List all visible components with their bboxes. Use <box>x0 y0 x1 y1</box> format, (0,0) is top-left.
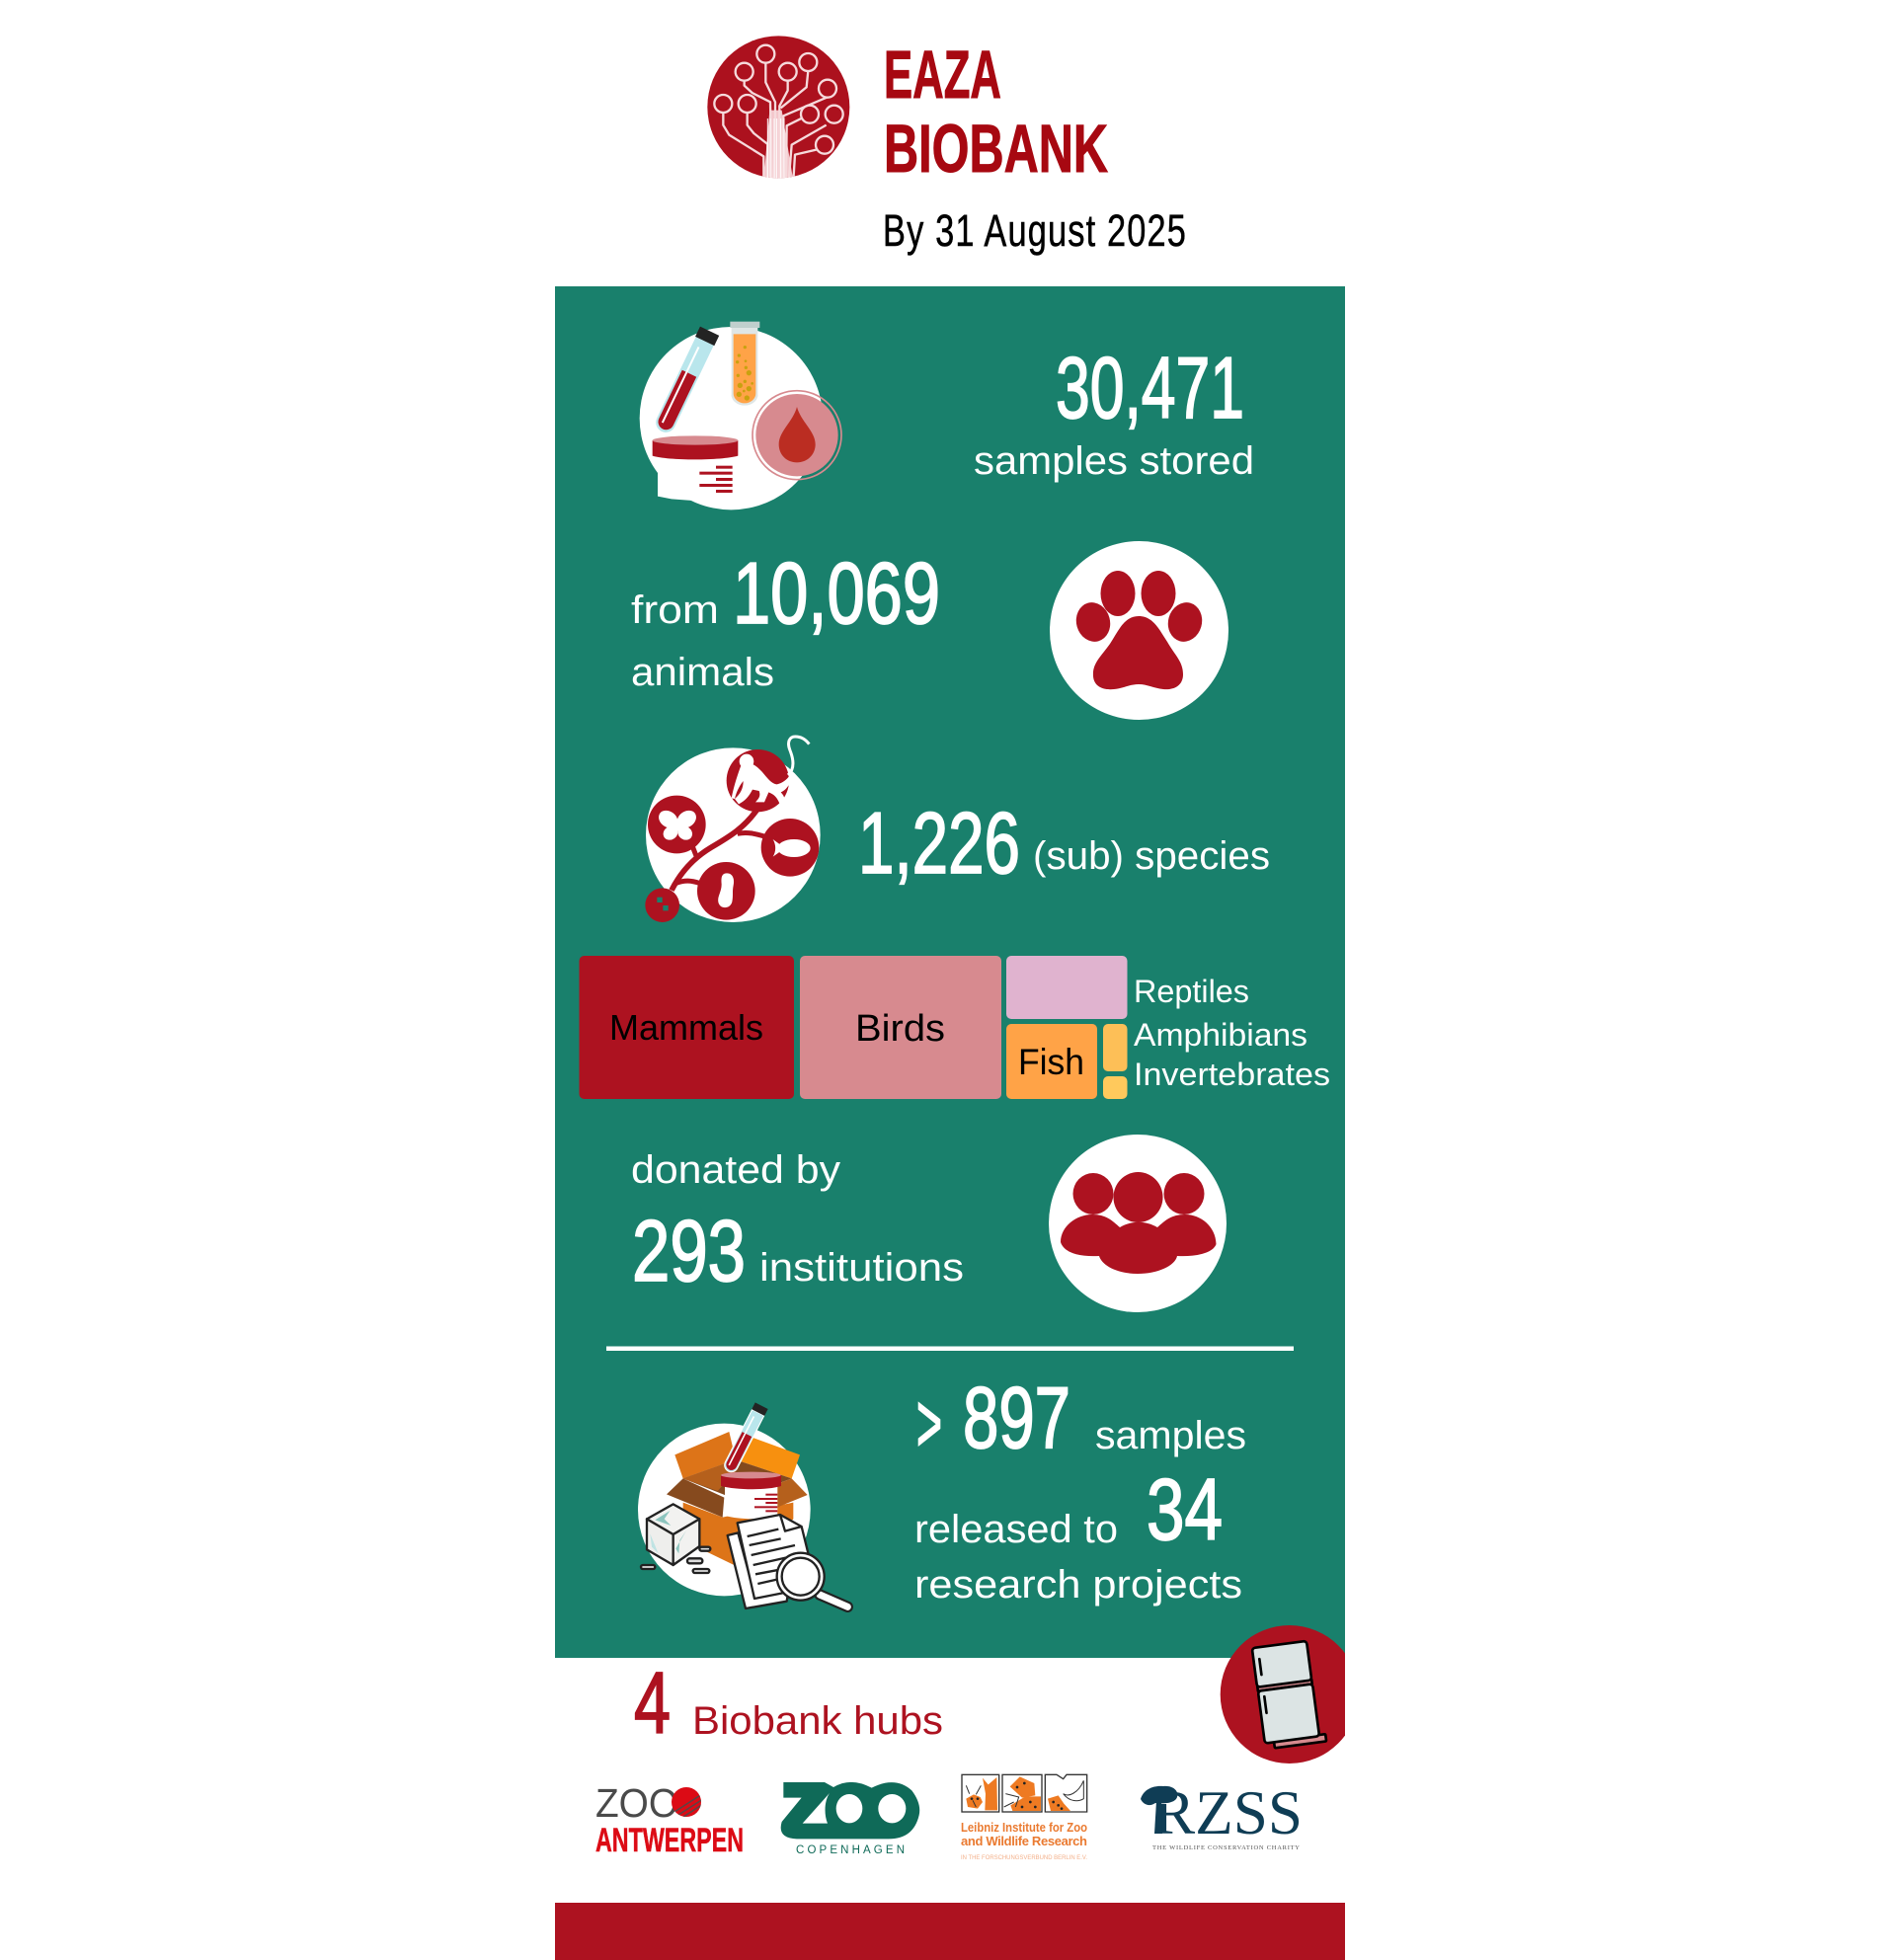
title: BIOBANK <box>884 111 1108 187</box>
logo: Zoo Antwerpen: ZOO <box>595 1780 678 1826</box>
stat: animals <box>631 544 940 694</box>
stat: research projects: 34 <box>1147 1460 1223 1558</box>
Mammals block: Mammals <box>609 1007 763 1048</box>
Reptiles block <box>1006 956 1128 1019</box>
monkey silhouette <box>732 737 809 804</box>
Fish block <box>1006 1024 1097 1099</box>
logo: Zoo Antwerpen: ANTWERPEN <box>595 1822 744 1859</box>
logo: Zoo Antwerpen <box>595 1787 743 1852</box>
logo: Leibniz Institute for Zoo and Wildlife Research <box>961 1774 1087 1861</box>
Birds block <box>800 956 1001 1099</box>
icon: species branches <box>645 737 821 922</box>
stat: samples stored: 30,471 <box>1056 339 1244 436</box>
stat: samples released: samples <box>1095 1414 1246 1457</box>
icon: people group <box>1049 1135 1227 1312</box>
infographic: EAZA Biobank <box>555 36 1345 1960</box>
stat: animals: 10,069 <box>733 544 940 642</box>
stat: research projects: research projects <box>914 1563 1242 1607</box>
treemap side labels: Invertebrates <box>1134 1057 1330 1092</box>
logo: Leibniz Institute for Zoo and Wildlife Research: and Wildlife Research <box>961 1834 1087 1848</box>
stat: institutions <box>631 1148 964 1299</box>
stat: institutions: 293 <box>632 1202 746 1299</box>
stat: animals: from <box>631 588 719 632</box>
logo: Leibniz Institute for Zoo and Wildlife Research: IN THE FORSCHUNGSVERBUND BERLIN E.V. <box>961 1854 1087 1861</box>
treemap side labels: Reptiles <box>1134 974 1249 1009</box>
stat: research projects: released to <box>914 1508 1118 1551</box>
Fish block: Fish <box>1018 1042 1084 1082</box>
stat: samples released: 897 <box>963 1369 1070 1466</box>
fish <box>773 839 811 857</box>
stat: biobank hubs: 4 <box>634 1654 671 1752</box>
treemap side labels <box>1134 974 1330 1092</box>
logo: Zoo Copenhagen: COPENHAGEN <box>796 1844 905 1856</box>
title <box>884 37 1108 187</box>
treemap side labels: Amphibians <box>1134 1017 1307 1053</box>
stat: species: (sub) species <box>1033 834 1270 878</box>
header <box>707 36 1187 256</box>
icon: shipping box with samples <box>638 1402 847 1608</box>
Birds block: Birds <box>855 1008 945 1050</box>
panel: green statistics background <box>555 286 1345 1658</box>
logo: tree of circuits <box>707 36 849 181</box>
Amphibians block <box>1103 1024 1128 1071</box>
stat: biobank hubs: Biobank hubs <box>692 1699 943 1743</box>
stat: species: 1,226 <box>858 794 1020 892</box>
peanut <box>718 873 734 907</box>
logo: RZSS: THE WILDLIFE CONSERVATION CHARITY <box>1152 1844 1300 1851</box>
logo: Leibniz Institute for Zoo and Wildlife Research: Leibniz Institute for Zoo <box>961 1820 1087 1835</box>
Invertebrates block <box>1103 1076 1128 1099</box>
stat: institutions: donated by <box>631 1148 840 1192</box>
logo: RZSS: RZSS <box>1153 1777 1303 1847</box>
stat: samples released <box>916 1369 1246 1469</box>
stat: species <box>858 794 1270 892</box>
icon: samples <box>640 322 841 510</box>
stat: biobank hubs <box>634 1654 943 1752</box>
icon: fridge <box>1221 1625 1359 1764</box>
stat: institutions: institutions <box>759 1246 964 1290</box>
stat: research projects <box>914 1460 1242 1607</box>
chart: species treemap <box>579 956 1330 1099</box>
document and magnifier <box>728 1515 847 1608</box>
stat: samples stored <box>974 339 1254 483</box>
ice cube <box>641 1504 710 1573</box>
icon: paw print <box>1050 541 1228 720</box>
footer bar <box>555 1903 1345 1960</box>
stat: animals: animals <box>631 651 774 694</box>
butterfly <box>656 807 699 843</box>
date: By 31 August 2025 <box>883 205 1187 256</box>
stat: samples stored: samples stored <box>974 439 1254 483</box>
stat: samples released: > <box>916 1376 942 1469</box>
logo: Zoo Copenhagen <box>781 1782 919 1856</box>
title: EAZA <box>884 37 1001 113</box>
Mammals block <box>579 956 794 1099</box>
